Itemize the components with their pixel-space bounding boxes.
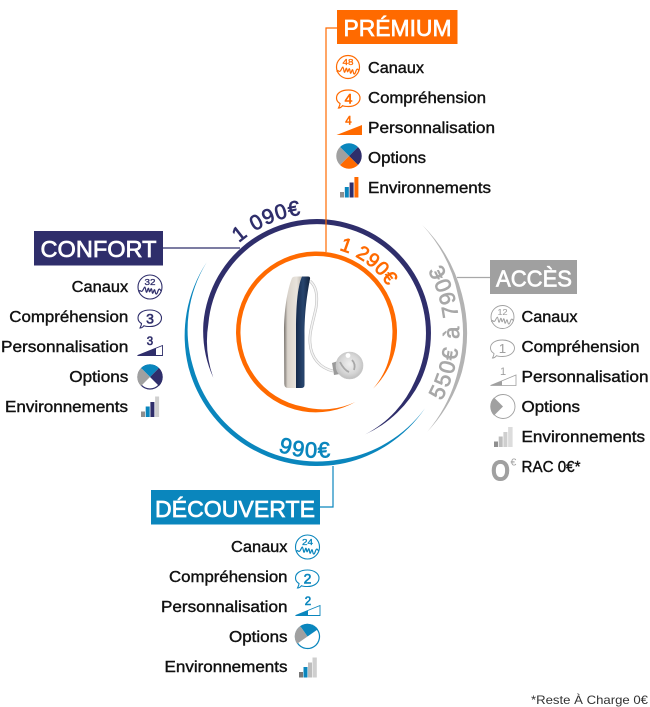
icon: options pie	[336, 143, 362, 169]
heading: prémium: PRÉMIUM	[344, 15, 452, 41]
label: canaux: Canaux	[72, 279, 128, 296]
label: environnements: Environnements	[164, 659, 288, 676]
label: options: Options	[522, 399, 580, 416]
icon: personnalisation 2: 2	[305, 596, 311, 608]
label: environnements: Environnements	[5, 399, 128, 416]
arc: découverte blue	[185, 262, 425, 466]
hearing aid illustration	[284, 276, 363, 388]
connector line	[326, 28, 337, 252]
icon: options pie	[137, 364, 163, 389]
icon: compréhension 3	[138, 310, 162, 328]
icon: canaux 48	[336, 56, 360, 78]
panel: prémium	[326, 10, 495, 252]
price: 550€ à 790€: 550€ à 790€	[428, 266, 460, 400]
label: options: Options	[229, 629, 288, 646]
icon: compréhension 4: 4	[345, 90, 353, 106]
connector line	[320, 466, 333, 507]
icon: personnalisation 4: 4	[345, 116, 352, 128]
icon: compréhension 2: 2	[304, 570, 312, 586]
icon: environnements bars	[494, 427, 513, 447]
icon: environnements bars	[141, 396, 159, 417]
circular price diagram	[184, 200, 468, 466]
icon: personnalisation 3	[138, 336, 162, 356]
icon: canaux 32	[138, 275, 162, 299]
icon: canaux 32: 32	[144, 277, 156, 287]
label: canaux: Canaux	[231, 539, 288, 556]
connector line	[457, 276, 490, 278]
icon: environnements bars	[340, 177, 358, 198]
price: 1 090€: 1 090€	[232, 200, 300, 242]
panel: accès	[457, 260, 648, 488]
heading: confort	[34, 231, 163, 266]
icon: canaux 12	[491, 306, 514, 328]
icon: personnalisation 1	[490, 366, 516, 386]
label: compréhension: Compréhension	[522, 339, 640, 356]
panel: confort	[1, 231, 240, 417]
label: environnements: Environnements	[368, 180, 491, 197]
price: 990€: 990€	[280, 438, 330, 458]
icon: personnalisation 3: 3	[147, 336, 153, 348]
label: RAC: RAC 0€*	[522, 459, 580, 476]
heading: découverte: DÉCOUVERTE	[155, 496, 315, 522]
icon: personnalisation 2	[296, 596, 320, 616]
panel: découverte	[151, 466, 333, 678]
price: 1 290€: 1 290€	[340, 238, 398, 285]
label: personnalisation: Personnalisation	[522, 369, 648, 386]
icon: zéro euro: €	[510, 456, 516, 468]
label: options: Options	[368, 150, 426, 167]
icon: personnalisation 1: 1	[500, 366, 506, 378]
label: canaux: Canaux	[368, 60, 424, 77]
label: personnalisation: Personnalisation	[1, 339, 128, 356]
label: environnements: Environnements	[522, 429, 645, 446]
label: options: Options	[69, 369, 128, 386]
icon: compréhension 1	[490, 340, 514, 358]
heading: accès: ACCÈS	[496, 266, 572, 292]
icon: compréhension 3: 3	[146, 310, 154, 326]
arc: confort navy	[203, 219, 431, 434]
arc: accès grey	[422, 225, 467, 432]
icon: personnalisation 4	[336, 116, 362, 135]
label: personnalisation: Personnalisation	[368, 120, 495, 137]
heading: confort: CONFORT	[40, 236, 156, 262]
icon: environnements bars	[299, 658, 317, 678]
icon: canaux 48: 48	[342, 57, 354, 67]
label: compréhension: Compréhension	[169, 569, 288, 586]
arc: prémium orange	[236, 252, 397, 412]
icon: canaux 24	[296, 535, 320, 559]
label: compréhension: Compréhension	[9, 309, 128, 326]
connector line	[163, 247, 240, 249]
icon: options pie	[490, 394, 515, 418]
icon: zéro euro: O	[491, 456, 510, 488]
label: canaux: Canaux	[522, 309, 578, 326]
icon: compréhension 2	[296, 570, 319, 588]
footnote: *Reste À Charge 0€	[531, 692, 648, 707]
icon: compréhension 1: 1	[499, 341, 506, 356]
icon: compréhension 4	[336, 90, 360, 108]
icon: canaux 24: 24	[302, 537, 313, 547]
label: compréhension: Compréhension	[368, 90, 486, 107]
label: personnalisation: Personnalisation	[161, 599, 288, 616]
icon: canaux 12: 12	[498, 307, 508, 317]
icon: options pie	[293, 622, 322, 650]
